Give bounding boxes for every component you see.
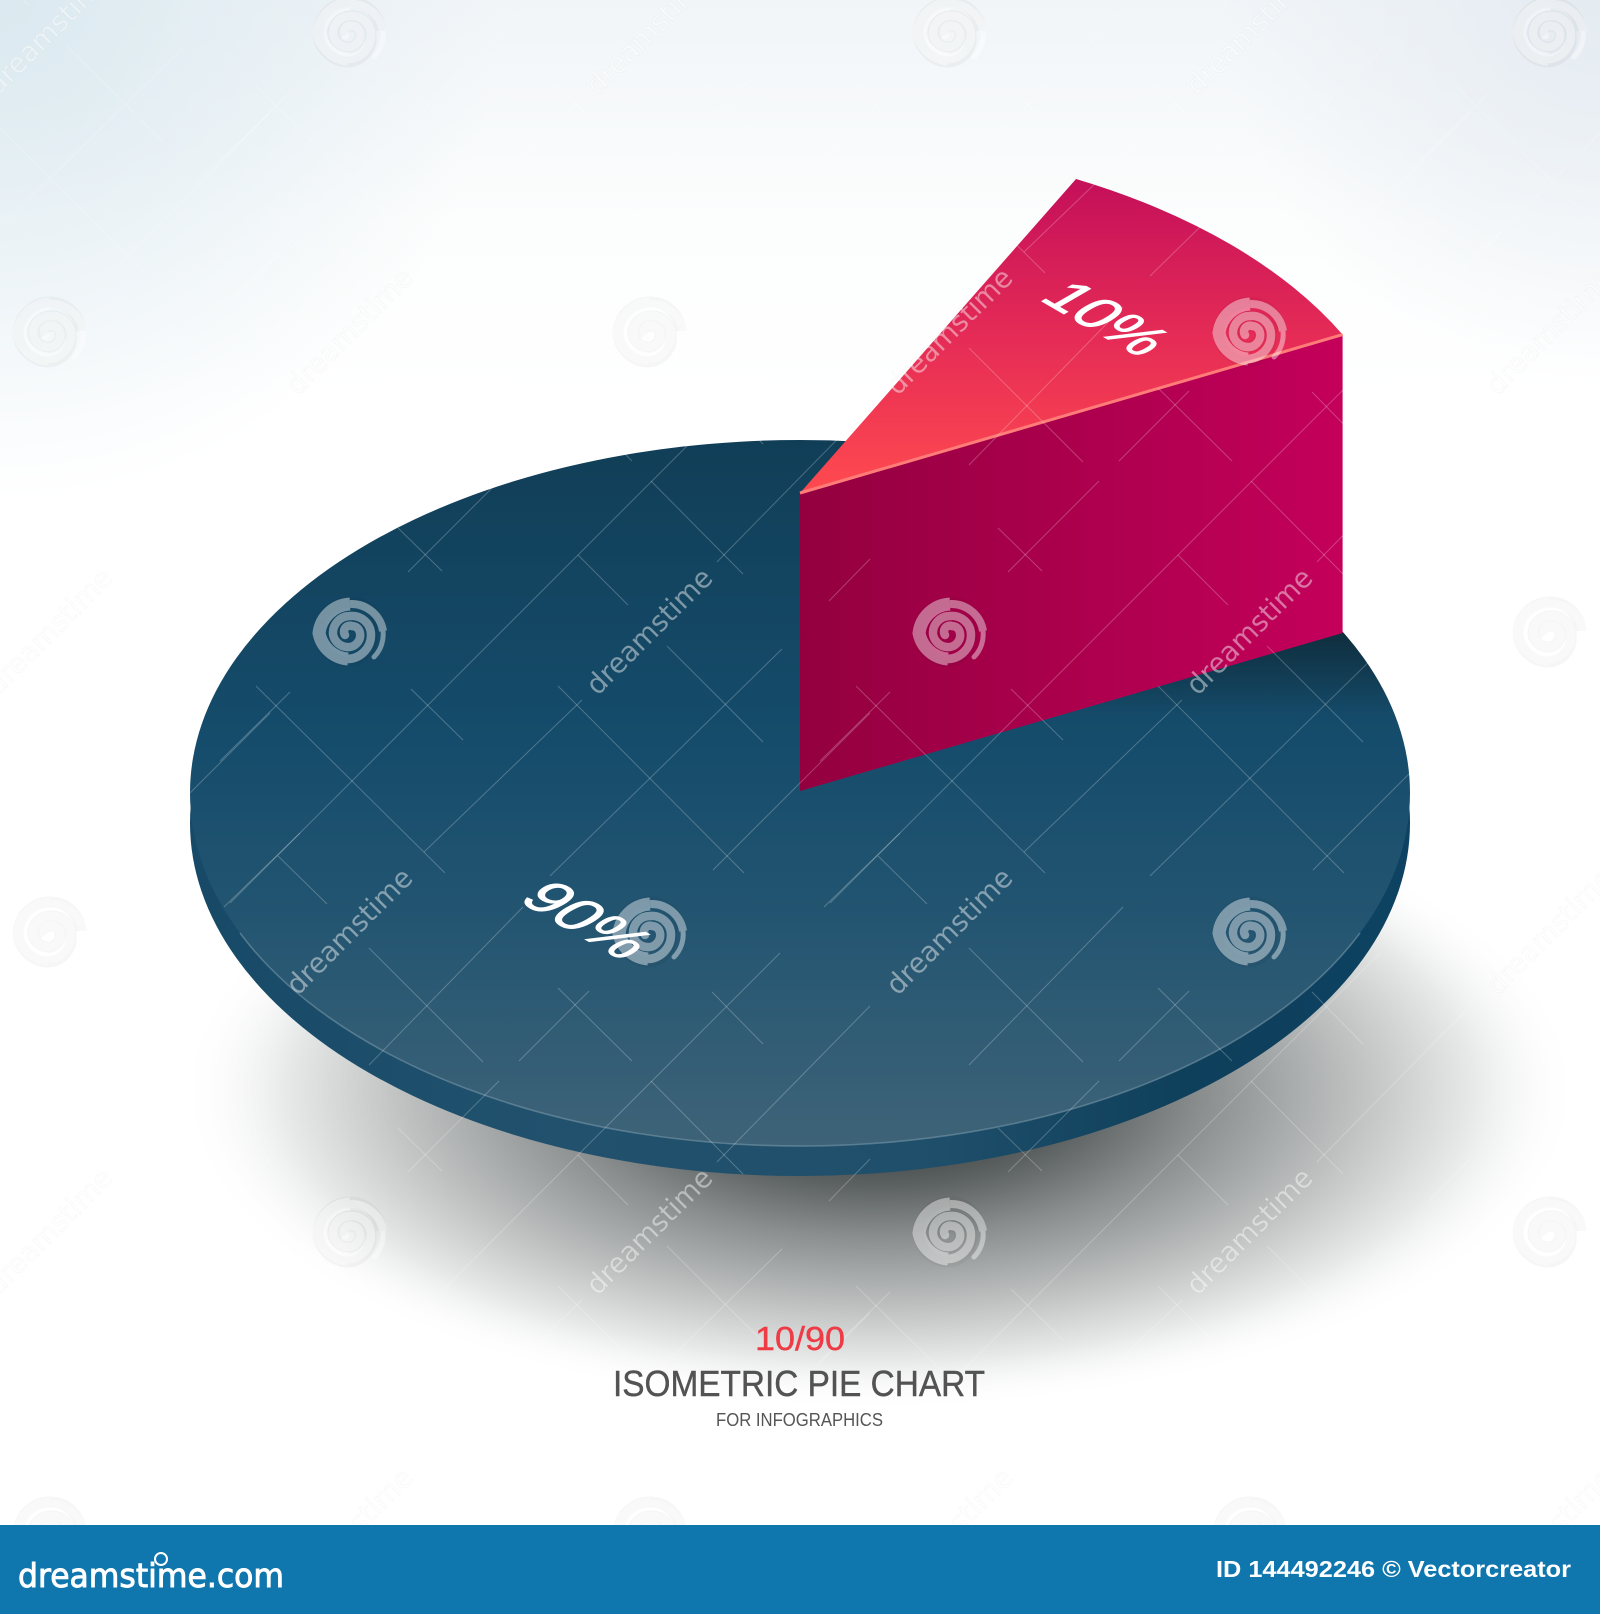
watermark wordmarks: dreamstime (1179, 1161, 1319, 1301)
wedge front wall (800, 335, 1343, 791)
cast shade beside the raised wedge (1120, 632, 1390, 702)
label: 10%: 10% (1027, 272, 1186, 365)
footer logo wordmark: dreamstime.com (18, 1556, 284, 1595)
watermark wordmarks: dreamstime (279, 861, 419, 1001)
main title: ISOMETRIC PIE CHART (613, 1363, 985, 1404)
watermark wordmarks: dreamstime (279, 261, 419, 401)
pie drop shadow (180, 770, 1580, 1410)
subtitle: FOR INFOGRAPHICS (716, 1410, 883, 1430)
pie top face: 90% segment (190, 440, 1410, 1146)
ratio heading: 10/90 (755, 1320, 845, 1357)
watermark wordmarks: dreamstime (279, 1461, 419, 1601)
watermark wordmarks: dreamstime (879, 1461, 1019, 1601)
watermark wordmarks: dreamstime (579, 561, 719, 701)
raised wedge: 10% segment (800, 179, 1343, 791)
icon: footer logo spiral (155, 1553, 167, 1565)
image id and credit: ID 144492246 © Vectorcreator (1216, 1556, 1571, 1582)
wedge top face (800, 179, 1343, 493)
wedge edge highlight (800, 335, 1343, 493)
footer band (0, 1525, 1600, 1614)
watermark cross lines (50, 104, 1428, 1344)
label: 90%: 90% (506, 872, 670, 968)
watermark wordmarks: dreamstime (879, 861, 1019, 1001)
highlight along the lower edge of the pie (240, 933, 1360, 1146)
watermark wordmarks: dreamstime (579, 1161, 719, 1301)
watermark wordmarks: dreamstime (879, 261, 1019, 401)
pie rim: base thickness (190, 470, 1410, 1176)
title block (613, 1320, 985, 1430)
watermark wordmarks: dreamstime (1179, 561, 1319, 701)
pie chart (190, 179, 1420, 1176)
